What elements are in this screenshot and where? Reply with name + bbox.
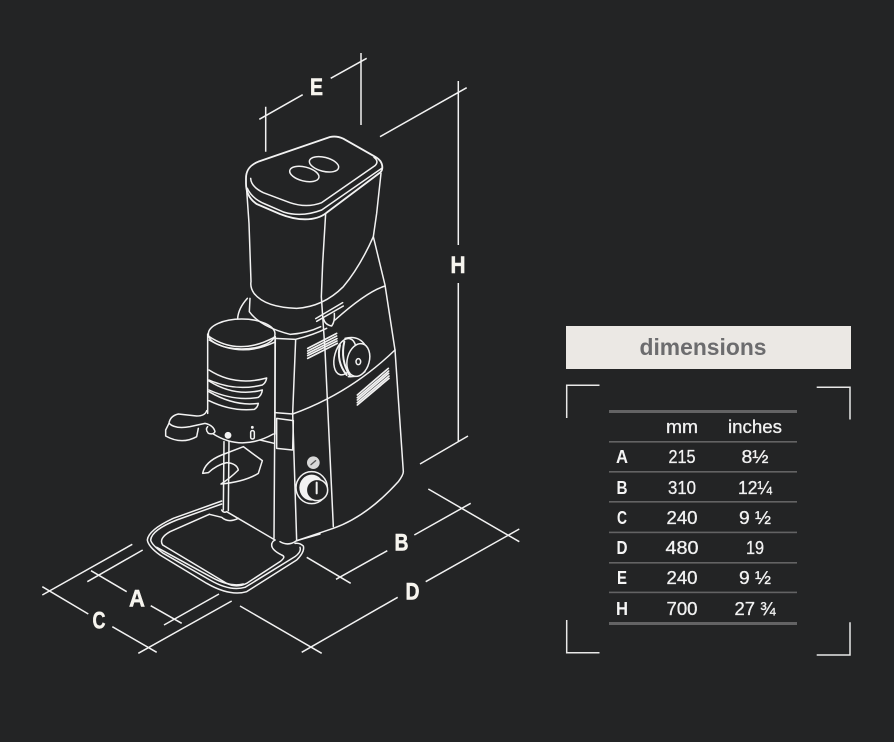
dimension letters: D bbox=[406, 578, 420, 606]
table inch values: 27 ¾ bbox=[734, 599, 776, 619]
table inch values: 19 bbox=[746, 538, 764, 558]
table header: mm bbox=[666, 417, 698, 437]
illustration: coffee grinder line drawing bbox=[147, 137, 403, 593]
dimension line C bbox=[42, 544, 232, 653]
grinder body bbox=[223, 328, 403, 541]
table row letters: B bbox=[616, 478, 628, 498]
table row letters: D bbox=[616, 538, 628, 558]
panel: dimensions bbox=[566, 326, 851, 655]
dimension line E bbox=[259, 53, 367, 152]
table mm values: 240 bbox=[666, 568, 698, 588]
grinder hopper bbox=[238, 137, 395, 350]
adjustment knob bbox=[330, 336, 373, 379]
table row letters: A bbox=[616, 447, 628, 467]
corner brackets bbox=[567, 385, 850, 655]
table row letters bbox=[616, 447, 628, 619]
table row letters: C bbox=[617, 508, 627, 528]
table inch values: 9 ½ bbox=[739, 508, 771, 528]
table inch values: 9 ½ bbox=[739, 568, 771, 588]
table mm values: 310 bbox=[668, 478, 696, 498]
dimension line H bbox=[380, 81, 468, 464]
table header: inches bbox=[728, 417, 782, 437]
table mm values: 240 bbox=[666, 508, 698, 528]
dimension letters: H bbox=[450, 252, 466, 279]
doser with fins, handle and fork bbox=[166, 319, 275, 484]
drip tray bbox=[147, 501, 320, 593]
dimension line B bbox=[307, 489, 519, 583]
dimension letters: E bbox=[310, 74, 323, 101]
table mm values bbox=[666, 447, 698, 619]
dimension line D bbox=[240, 529, 519, 653]
table rules bbox=[609, 410, 797, 625]
heading bar bbox=[566, 326, 851, 369]
dimension letters: A bbox=[129, 586, 145, 612]
table header bbox=[666, 417, 782, 437]
table inch values: 8½ bbox=[742, 447, 768, 467]
table mm values: 700 bbox=[666, 599, 698, 619]
table row letters: H bbox=[616, 599, 628, 619]
timer button and dial bbox=[296, 456, 328, 504]
heading bar: dimensions bbox=[640, 334, 766, 360]
dimension letters: C bbox=[92, 608, 106, 634]
table mm values: 215 bbox=[668, 447, 696, 467]
table row letters: E bbox=[617, 568, 627, 588]
dimension line A bbox=[87, 550, 219, 625]
table mm values: 480 bbox=[666, 538, 698, 558]
table inch values: 12¼ bbox=[738, 478, 773, 498]
dimension letters: B bbox=[394, 530, 408, 556]
table inch values bbox=[734, 447, 776, 619]
dimension letters bbox=[92, 74, 466, 634]
